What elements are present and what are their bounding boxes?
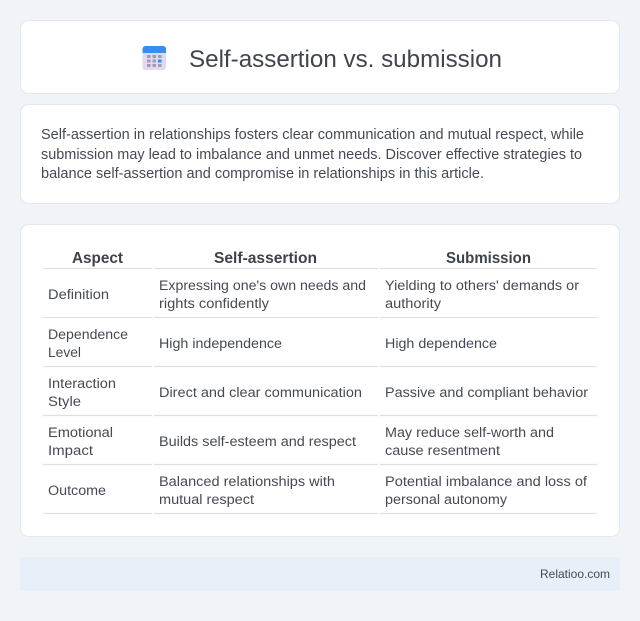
table row: definition: Expressing one's own needs and	[159, 278, 366, 294]
table row: definition: Definition	[48, 287, 109, 303]
table row: outcome	[48, 474, 587, 508]
footer text: Relatioo.com	[540, 567, 610, 581]
table row: dependence level: High independence	[159, 336, 282, 352]
table row: definition: authority	[385, 296, 442, 312]
panel: comparison table	[20, 224, 620, 536]
table row: emotional impact: Impact	[48, 443, 93, 459]
table row: definition: rights confidently	[159, 296, 270, 312]
table header row: Self-assertion	[214, 250, 317, 267]
table row: dependence level: High dependence	[385, 336, 497, 352]
table row: definition	[48, 278, 579, 312]
table row: dependence level: Dependence	[48, 327, 128, 343]
table row: dependence level	[48, 327, 497, 361]
table row: outcome: personal autonomy	[385, 492, 508, 508]
footer bar	[20, 557, 620, 591]
table header row: Aspect	[72, 250, 124, 267]
table header row	[72, 250, 531, 267]
table row: emotional impact: cause resentment	[385, 443, 500, 459]
table row: dependence level: Level	[48, 345, 81, 361]
icon: calendar	[142, 46, 166, 70]
table row: outcome: Potential imbalance and loss of	[385, 474, 587, 490]
table row: interaction style: Style	[48, 394, 81, 410]
panel: title card	[20, 20, 620, 94]
table row: emotional impact: Builds self-esteem and respect	[159, 434, 356, 450]
table row: interaction style: Interaction	[48, 376, 116, 392]
table header row: Submission	[446, 250, 531, 267]
text block: introduction: balance self-assertion and compromise in relationships in this article.	[41, 166, 484, 182]
table row: definition: Yielding to others' demands or	[385, 278, 579, 294]
table row: emotional impact: Emotional	[48, 425, 113, 441]
table row: outcome: mutual respect	[159, 492, 254, 508]
text block: introduction: submission may lead to imbalance and unmet needs. Discover effective strategies to	[41, 147, 582, 163]
panel: introduction	[20, 104, 620, 204]
table row: interaction style: Passive and compliant behavior	[385, 385, 588, 401]
table row: emotional impact	[48, 425, 554, 459]
table row: interaction style: Direct and clear communication	[159, 385, 362, 401]
table row: outcome: Outcome	[48, 483, 106, 499]
title: Self-assertion vs. submission	[189, 46, 502, 73]
text block: introduction: Self-assertion in relationships fosters clear communication and mutual respect, while	[41, 127, 584, 143]
table row: emotional impact: May reduce self-worth and	[385, 425, 554, 441]
table row: outcome: Balanced relationships with	[159, 474, 335, 490]
table row: interaction style	[48, 376, 588, 410]
